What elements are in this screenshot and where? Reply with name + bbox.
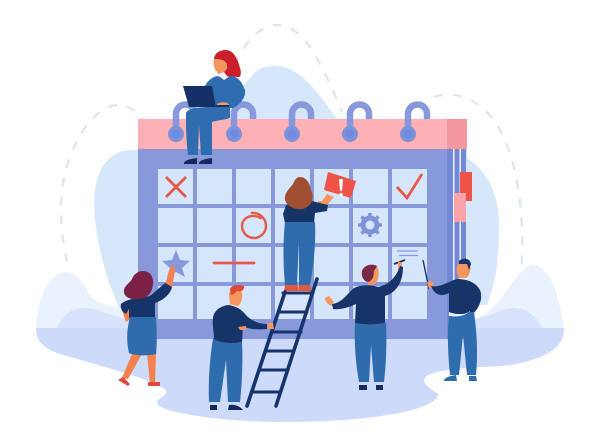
face: [214, 59, 227, 73]
head: [229, 288, 242, 307]
hair: [459, 259, 471, 270]
shoes: [444, 375, 477, 381]
sweater: [431, 279, 481, 314]
icon: cross mark: [166, 177, 186, 197]
left hand: [325, 296, 334, 306]
icon: star: [162, 250, 190, 277]
calendar: [138, 104, 472, 339]
shirt: [283, 201, 328, 223]
laptop: [183, 86, 229, 107]
jacket: [205, 76, 245, 108]
hand: [238, 323, 274, 330]
ladder: [247, 279, 317, 406]
trousers: [209, 338, 242, 402]
person: man writing: [325, 260, 405, 390]
side tabs: [454, 172, 472, 222]
person: man with pointer: [423, 259, 481, 381]
person: woman on ladder: [283, 177, 334, 291]
collar: [230, 304, 240, 310]
binder rings: [168, 104, 427, 142]
icon: gear: [358, 213, 382, 237]
background: blobs, hills and floor: [36, 66, 564, 422]
person: woman sitting with laptop: [183, 50, 245, 164]
collar: [458, 278, 468, 282]
legs: [186, 107, 230, 155]
calendar header: [138, 119, 467, 149]
calendar grid: [158, 169, 427, 319]
person: man beside ladder: [209, 285, 274, 410]
collar: [217, 72, 227, 82]
hair: [230, 285, 244, 295]
dashed arcs: [61, 25, 522, 274]
hair: [285, 177, 313, 209]
icon: dash line: [214, 262, 254, 264]
hair: [214, 50, 241, 77]
raised hand and pen: [394, 260, 405, 264]
shoes: [118, 377, 160, 386]
hair: [362, 265, 377, 282]
skirt: [127, 317, 157, 355]
icon: check mark: [397, 174, 422, 198]
shoes: [184, 158, 212, 164]
red alert note: [324, 172, 356, 198]
icon: circle scribble: [242, 213, 266, 238]
icon: note lines: [397, 251, 418, 256]
sweater: [213, 305, 267, 343]
hand: [217, 102, 229, 105]
trousers: [284, 222, 315, 285]
pointer: [423, 260, 429, 289]
hair: [124, 271, 153, 299]
top: [121, 283, 172, 318]
calendar body: [138, 149, 447, 339]
shoes: [210, 405, 243, 410]
shoes: [359, 385, 383, 390]
hand: [427, 281, 434, 289]
head: [457, 262, 470, 279]
trousers: [355, 323, 386, 382]
sweater: [332, 266, 403, 324]
raised arm: [165, 265, 175, 287]
arm: [318, 194, 334, 206]
person: woman with star: [118, 265, 175, 386]
trousers: [448, 312, 477, 375]
shoes: [284, 285, 312, 291]
head: [368, 266, 379, 285]
legs: [122, 354, 156, 383]
shirt hem: [449, 311, 470, 317]
